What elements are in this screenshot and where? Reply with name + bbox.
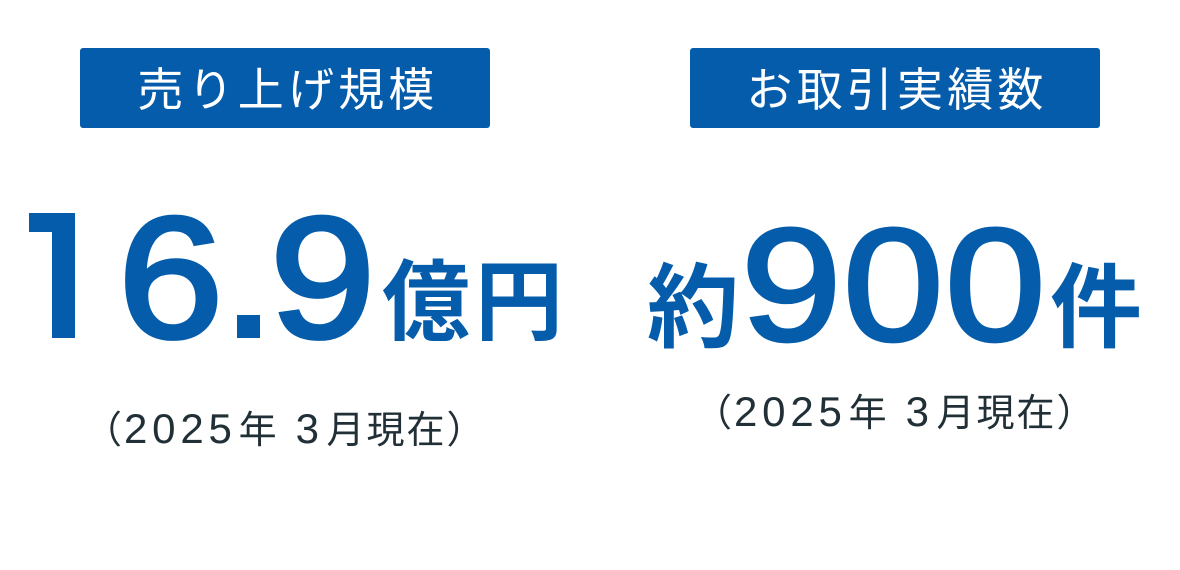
value: 16.9 oku yen: 億	[382, 232, 470, 359]
value: about 900 cases: 9	[741, 195, 842, 374]
value: about 900 cases: 0	[945, 195, 1046, 374]
heading badge: transaction count	[690, 48, 1100, 128]
note: as of March 2025: （2025年 3月現在）	[694, 382, 1097, 437]
value: 16.9 oku yen: 6	[118, 182, 223, 374]
value: about 900 cases: 0	[843, 195, 944, 374]
heading badge: transaction count: お取引実績数	[746, 54, 1048, 120]
note: as of March 2025: （2025年 3月現在）	[84, 399, 487, 454]
value: 16.9 oku yen	[29, 182, 563, 374]
heading badge: sales scale: 売り上げ規模	[137, 54, 439, 120]
value: about 900 cases: 件	[1050, 234, 1142, 367]
value: about 900 cases	[647, 195, 1142, 374]
value: 16.9 oku yen: 円	[475, 232, 563, 359]
value: 16.9 oku yen: 9	[270, 182, 375, 374]
heading badge: sales scale	[80, 48, 490, 128]
value: about 900 cases: 約	[647, 234, 739, 367]
